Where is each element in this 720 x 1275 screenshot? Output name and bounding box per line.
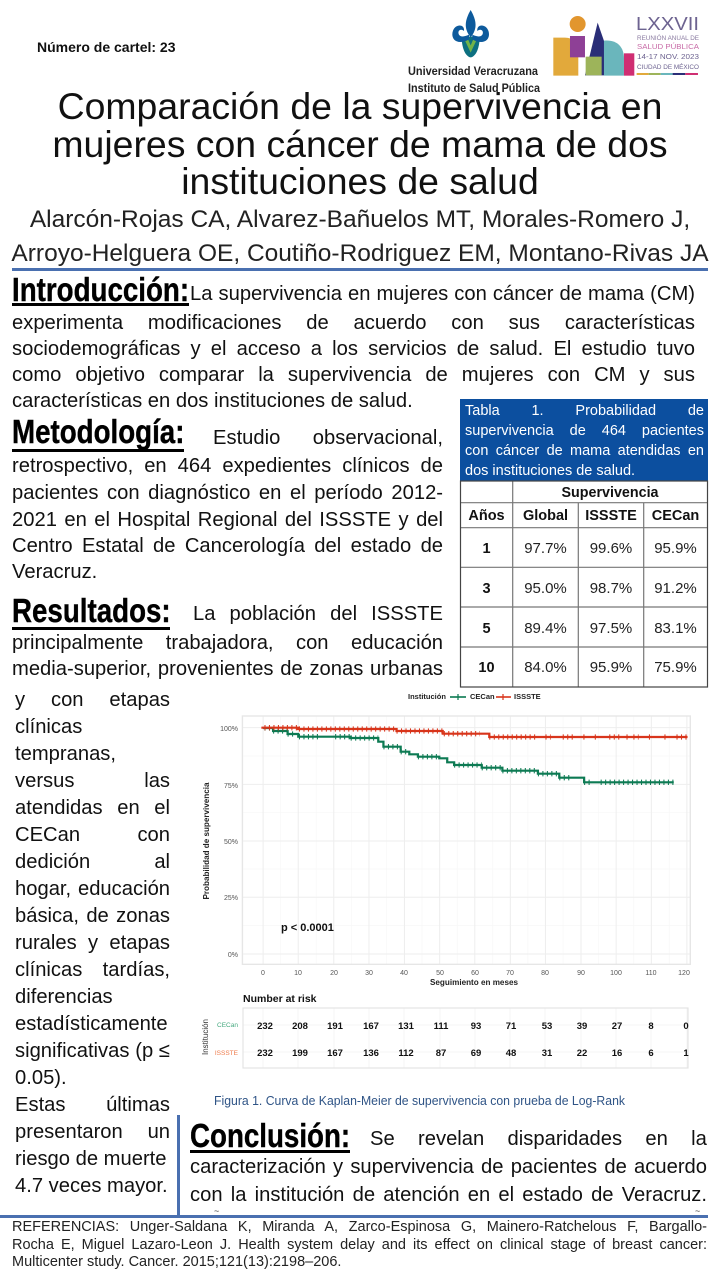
y axis labels: 75%	[224, 783, 238, 790]
references: REFERENCIAS: Unger-Saldana K, Miranda A, Zarco-Espinosa G, Mainero-Ratchelous F, Bargallo-	[12, 1219, 707, 1235]
references: Multicenter study. Cancer. 2015;121(13):2198–206.	[12, 1254, 341, 1270]
y axis title: Probabilidad de supervivencia	[201, 782, 211, 900]
y axis labels: 100%	[220, 726, 238, 733]
x axis labels: 120	[678, 970, 690, 977]
panel: resultados: dedición al	[15, 850, 170, 873]
table 1: survival probability: 95.0%	[524, 580, 567, 597]
table 1: survival probability: 95.9%	[654, 540, 697, 557]
icon: LXXVII Reunión Anual logo	[553, 14, 700, 76]
poster number: Número de cartel: 23	[37, 39, 176, 55]
table 1: survival probability: Años	[468, 508, 505, 524]
authors: Arroyo-Helguera OE, Coutiño-Rodriguez EM, Montano-Rivas JA	[11, 240, 709, 267]
legend: Institución	[408, 692, 446, 701]
x axis labels: 10	[294, 970, 302, 977]
table 1: survival probability: 3	[482, 581, 491, 597]
panel: resultados: 4.7 veces mayor.	[15, 1174, 168, 1197]
table: number at risk: 232	[257, 1048, 273, 1059]
x axis labels: 110	[645, 970, 657, 977]
figure caption: Figura 1. Curva de Kaplan-Meier de supervivencia con prueba de Log-Rank	[214, 1094, 626, 1108]
CECan curve	[263, 728, 674, 782]
table: number at risk: 71	[506, 1021, 517, 1032]
cropped tilde marks above the rule: ~	[695, 1206, 700, 1216]
panel: resultados: tempranas,	[15, 742, 116, 765]
table: number at risk: 112	[398, 1048, 414, 1059]
table header: title of table 1: supervivencia de 464 pacientes	[465, 423, 704, 439]
table 1: survival probability: 83.1%	[654, 620, 697, 637]
table: number at risk: 232	[257, 1021, 273, 1032]
table 1: survival probability: 84.0%	[524, 659, 567, 676]
x axis labels: 40	[400, 970, 408, 977]
panel: resultados: diferencias	[15, 985, 113, 1008]
table: number at risk: 8	[648, 1021, 654, 1032]
table 1: survival probability: 75.9%	[654, 659, 697, 676]
panel: resultados: y con etapas	[15, 688, 170, 711]
title	[52, 85, 668, 202]
table: number at risk: 6	[648, 1048, 654, 1059]
panel: metodología: retrospectivo, en 464 expedientes clínicos de	[12, 454, 443, 477]
heading: metodología: Metodología:	[12, 413, 184, 450]
table 1: survival probability: 95.9%	[590, 659, 632, 676]
panel: resultados: básica, de zonas	[15, 904, 170, 927]
ISSSTE curve	[261, 728, 688, 737]
y axis labels: 0%	[228, 952, 238, 959]
heading: resultados: Resultados:	[12, 592, 171, 629]
table: number at risk: 136	[363, 1048, 379, 1059]
table 1: survival probability: 1	[482, 541, 491, 557]
title: Comparación de la supervivencia en	[58, 85, 662, 127]
table: number at risk: 39	[577, 1021, 587, 1032]
authors: Alarcón-Rojas CA, Alvarez-Bañuelos MT, Morales-Romero J,	[30, 206, 690, 233]
panel: metodología	[12, 413, 443, 583]
legend: CECan	[470, 692, 495, 701]
table 1: survival probability: 97.5%	[590, 620, 632, 637]
table: number at risk: 48	[506, 1048, 516, 1059]
table: number at risk	[201, 993, 689, 1068]
table 1: survival probability: 98.7%	[590, 580, 632, 597]
panel: resultados: clínicas tardías,	[15, 958, 170, 981]
x axis labels	[261, 970, 690, 977]
x axis labels: 80	[541, 970, 549, 977]
table: number at risk: 69	[471, 1048, 481, 1059]
table: number at risk: 199	[292, 1048, 308, 1059]
panel: resultados: atendidas en el	[15, 796, 170, 819]
table 1: survival probability: Supervivencia	[562, 485, 659, 501]
panel: metodología: Centro Estatal de Cancerología del estado de	[12, 534, 443, 557]
panel: resultados: significativas (p ≤	[15, 1039, 170, 1062]
table: number at risk: ISSSTE	[215, 1050, 239, 1057]
table 1: survival probability: Global	[523, 508, 568, 524]
panel: resultados: estadísticamente	[15, 1012, 168, 1035]
table: number at risk: 93	[471, 1021, 481, 1032]
references	[12, 1219, 707, 1270]
panel: metodología: Veracruz.	[12, 560, 97, 583]
table 1: survival probability: 91.2%	[654, 580, 697, 597]
y axis labels	[220, 726, 238, 959]
panel: introducción: características en dos instituciones de salud.	[12, 389, 413, 412]
icon: LXXVII Reunión Anual logo: SALUD PÚBLICA	[637, 42, 699, 51]
x axis labels: 100	[610, 970, 622, 977]
table 1: survival probability: 10	[478, 660, 495, 676]
icon: LXXVII Reunión Anual logo: REUNIÓN ANUAL DE	[637, 33, 700, 42]
table 1: survival probability: ISSSTE	[585, 508, 637, 524]
table: number at risk: Institución	[201, 1019, 210, 1055]
panel: resultados: CECan con	[15, 823, 170, 846]
x axis labels: 30	[365, 970, 373, 977]
y axis labels: 25%	[224, 895, 238, 902]
table: number at risk: CECan	[217, 1022, 238, 1029]
table: number at risk: 0	[683, 1021, 689, 1032]
table: number at risk: 16	[612, 1048, 622, 1059]
table 1: survival probability: 89.4%	[524, 620, 567, 637]
title: mujeres con cáncer de mama de dos	[52, 123, 668, 165]
panel: resultados: versus las	[15, 769, 170, 792]
x axis labels: 90	[577, 970, 585, 977]
icon: Universidad Veracruzana logo	[408, 10, 541, 95]
panel: resultados: rurales y etapas	[15, 931, 170, 954]
x axis labels: 0	[261, 970, 265, 977]
panel: introducción: La supervivencia en mujeres con cáncer de mama (CM)	[190, 282, 695, 305]
panel: resultados: Estas últimas	[15, 1093, 170, 1116]
table 1: survival probability: CECan	[652, 508, 699, 524]
p value: p < 0.0001	[281, 922, 334, 934]
title: instituciones de salud	[181, 160, 539, 202]
panel: introducción	[12, 271, 695, 412]
icon: Universidad Veracruzana logo: Instituto de Salud Pública	[408, 83, 541, 95]
table: number at risk: 167	[327, 1048, 343, 1059]
legend: ISSSTE	[514, 692, 541, 701]
authors	[11, 206, 709, 267]
panel: introducción: experimenta modificaciones de acuerdo con sus características	[12, 311, 695, 334]
panel: resultados: hogar, educación	[15, 877, 170, 900]
table: number at risk: 167	[363, 1021, 379, 1032]
table: number at risk: 191	[327, 1021, 344, 1032]
panel: introducción: como objetivo comparar la supervivencia de mujeres con CM y sus	[12, 363, 695, 386]
panel: resultados: 0.05).	[15, 1066, 67, 1089]
references: Rocha E, Miguel Lazaro-Leon J. Health system delay and its effect on clinical stage of breast cancer:	[12, 1237, 707, 1253]
panel: metodología: pacientes con diagnóstico en el período 2012-	[12, 481, 443, 504]
panel: resultados: clínicas	[15, 715, 82, 738]
table: number at risk: 53	[542, 1021, 552, 1032]
panel: conclusión: con la institución de atención en el estado de Veracruz.	[190, 1183, 707, 1206]
panel: conclusión: Se revelan disparidades en la	[370, 1127, 707, 1150]
table 1: survival probability: 99.6%	[590, 540, 632, 557]
table: number at risk: 131	[398, 1021, 415, 1032]
x axis labels: 60	[471, 970, 479, 977]
table 1: survival probability: 5	[482, 621, 491, 637]
panel: conclusión	[190, 1117, 707, 1206]
cropped tilde marks above the rule	[214, 1206, 700, 1216]
panel: conclusión: caracterización y supervivencia de pacientes de acuerdo	[190, 1155, 707, 1178]
heading: introducción: Introducción:	[12, 271, 189, 308]
table 1: survival probability: 97.7%	[524, 540, 567, 557]
panel: resultados: riesgo de muerte	[15, 1147, 167, 1170]
table: number at risk: 87	[436, 1048, 446, 1059]
y axis labels: 50%	[224, 839, 238, 846]
x axis title: Seguimiento en meses	[430, 977, 518, 987]
table: number at risk: 208	[292, 1021, 308, 1032]
table header: title of table 1: Tabla 1. Probabilidad de	[465, 403, 704, 419]
heading: conclusión: Conclusión:	[190, 1117, 350, 1154]
table: number at risk: Number at risk	[243, 993, 317, 1005]
table header: title of table 1	[460, 399, 708, 481]
icon: LXXVII Reunión Anual logo: CIUDAD DE MÉXICO	[637, 62, 699, 71]
table header: title of table 1: con cáncer de mama atendidas en	[465, 443, 704, 459]
panel: resultados: principalmente trabajadora, con educación	[12, 631, 443, 654]
legend	[408, 692, 541, 701]
table: number at risk: 111	[434, 1021, 449, 1032]
panel: metodología: 2021 en el Hospital Regional del ISSSTE y del	[12, 508, 443, 531]
icon: LXXVII Reunión Anual logo: LXXVII	[636, 14, 699, 34]
table header: title of table 1: dos instituciones de salud.	[465, 463, 635, 479]
panel: resultados	[12, 592, 443, 1197]
x axis labels: 50	[436, 970, 444, 977]
panel: introducción: sociodemográficas y el acceso a los servicios de salud. El estudio tuvo	[12, 337, 695, 360]
table: number at risk: 22	[577, 1048, 587, 1059]
plot area with curves	[242, 716, 690, 964]
x axis labels: 70	[506, 970, 514, 977]
panel: resultados: presentaron un	[15, 1120, 170, 1143]
table 1: survival probability	[460, 481, 708, 687]
table: number at risk: 31	[542, 1048, 553, 1059]
panel: resultados: media-superior, provenientes de zonas urbanas	[12, 657, 443, 680]
panel: resultados: La población del ISSSTE	[193, 602, 443, 625]
chart: Kaplan-Meier survival curve	[201, 692, 690, 987]
panel: metodología: Estudio observacional,	[213, 426, 443, 449]
table: number at risk: 1	[683, 1048, 689, 1059]
table: number at risk: 27	[612, 1021, 622, 1032]
icon: LXXVII Reunión Anual logo: 14-17 NOV. 2023	[637, 52, 699, 61]
icon: Universidad Veracruzana logo: Universidad Veracruzana	[408, 64, 538, 78]
x axis labels: 20	[330, 970, 338, 977]
cropped tilde marks above the rule: ~	[214, 1206, 219, 1216]
